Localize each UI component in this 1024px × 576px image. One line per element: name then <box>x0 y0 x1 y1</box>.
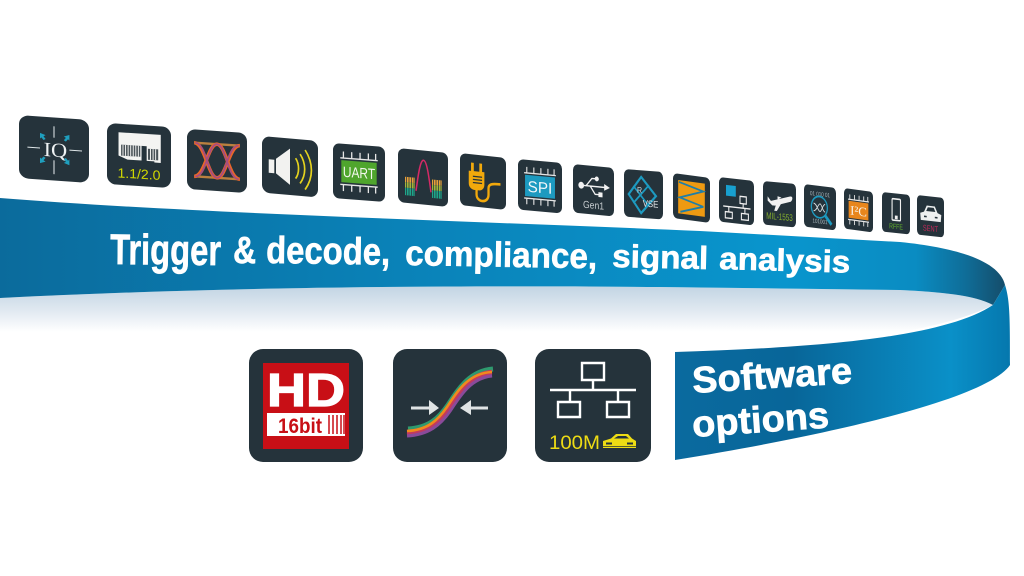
icon: USB Gen1 <box>573 164 614 216</box>
ribbon heading: compliance, <box>405 234 598 276</box>
icon: phone RFFE: RFFE <box>889 223 903 232</box>
icon: USB Gen1: Gen1 <box>583 199 604 213</box>
software options label <box>691 350 853 445</box>
icon: VSE diamond: R <box>637 185 642 195</box>
icon: HD 16bit: HD <box>267 364 345 416</box>
icon: I2C chip: I²C <box>850 204 867 220</box>
ribbon heading <box>110 226 851 280</box>
icon: VSE diamond <box>624 169 663 220</box>
ribbon: lower band <box>675 285 1010 460</box>
ribbon heading: signal <box>612 238 709 276</box>
icon: plane MIL-1553: MIL-1553 <box>766 210 793 223</box>
icon: SPI chip: SPI <box>528 179 552 198</box>
icon: plug <box>460 153 506 210</box>
icon: plane MIL-1553 <box>763 181 796 228</box>
ribbon heading: analysis <box>719 241 851 280</box>
ribbon: upper band <box>0 198 1005 305</box>
icon: binary magnifier: 01 010 01 <box>810 190 830 200</box>
ribbon shadow <box>0 286 993 345</box>
icon: binary magnifier <box>804 184 836 230</box>
icon: network with chip <box>719 177 754 226</box>
icon: speaker <box>262 136 318 198</box>
ribbon heading: decode, <box>266 230 390 274</box>
icon: spectrum <box>398 148 448 207</box>
icon: zigzag waveform <box>673 173 710 223</box>
icon: 100M automotive network <box>535 349 651 462</box>
icon: 100M automotive network: 100M <box>549 432 600 454</box>
icon: HD 16bit <box>249 349 363 462</box>
icon: narrowing signal curve <box>393 349 507 462</box>
ribbon heading: Trigger <box>110 226 222 275</box>
icon: binary magnifier: 101001 <box>813 218 828 227</box>
icon: I2C chip <box>844 188 873 232</box>
icon: barcode 1.1/2.0: 1.1/2.0 <box>117 166 161 183</box>
icon: UART chip <box>333 143 385 202</box>
ribbon heading: & <box>233 230 256 272</box>
icon: eye diagram <box>187 129 247 193</box>
software options label: options <box>691 395 830 445</box>
icon: binary magnifier: 1 10 <box>816 206 824 213</box>
software options label: Software <box>691 350 853 401</box>
icon: SPI chip <box>518 159 562 214</box>
icon: car SENT <box>917 195 944 238</box>
icon: IQ <box>19 115 89 183</box>
icon: UART chip: UART <box>343 164 375 183</box>
icon: car SENT: SENT <box>923 223 939 234</box>
icon: IQ: IQ <box>44 138 68 162</box>
icon: barcode 1.1/2.0 <box>107 123 171 188</box>
icon: HD 16bit: 16bit <box>278 415 322 438</box>
icon: phone RFFE <box>882 192 910 234</box>
icon: VSE diamond: VSE <box>643 198 658 210</box>
